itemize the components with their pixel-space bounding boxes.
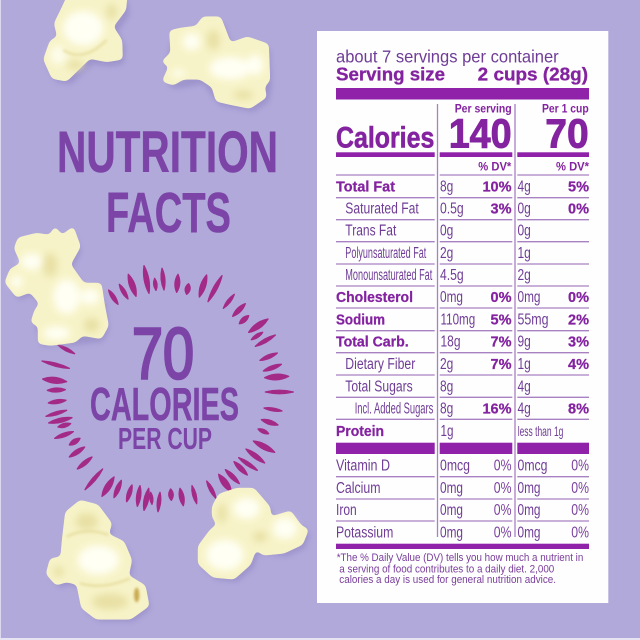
row: protein: Protein <box>336 424 384 440</box>
footnote <box>337 552 583 586</box>
title: Nutrition Facts: NUTRITION <box>57 120 278 185</box>
row: saturated fat: 0g <box>518 201 531 218</box>
row: cholesterol: 0mg <box>440 289 463 306</box>
icon: popcorn middle left <box>5 226 109 346</box>
row: potassium: 0mg <box>440 524 463 541</box>
row: dietary fiber <box>345 356 589 373</box>
row: polyunsaturated fat: Polyunsaturated Fat <box>345 245 427 262</box>
row: cholesterol: 0% <box>568 290 589 306</box>
percent daily value headers <box>478 162 590 174</box>
panel: nutrition facts label <box>317 31 608 603</box>
row: potassium: Potassium <box>336 524 393 541</box>
title: Nutrition Facts <box>57 120 278 245</box>
footnote: calories a day is used for general nutrition advice. <box>339 574 556 586</box>
row: vitamin d: 0mcg <box>440 458 470 475</box>
row: iron <box>336 502 589 519</box>
row: sodium: 2% <box>568 313 589 329</box>
row: calcium: 0mg <box>440 480 463 497</box>
calories row: Calories <box>336 121 434 154</box>
calories row: 140 <box>449 110 512 156</box>
row: calcium: 0% <box>571 480 589 497</box>
row: calcium: 0mg <box>518 480 540 497</box>
percent daily value headers: % DV* <box>556 162 590 174</box>
section bars <box>336 443 589 454</box>
row: cholesterol: 0mg <box>518 289 540 306</box>
row: added sugars: 8g <box>440 400 453 417</box>
row: saturated fat: Saturated Fat <box>345 201 419 218</box>
callout: 70 calories per cup: CALORIES <box>90 378 239 430</box>
row: sodium: Sodium <box>336 313 385 329</box>
table rule lines <box>336 175 589 521</box>
row: monounsaturated fat: Monounsaturated Fat <box>345 267 433 284</box>
column headers: Per 1 cup <box>542 104 589 116</box>
serving size: 2 cups (28g) <box>478 65 588 85</box>
row: total sugars: Total Sugars <box>345 378 413 395</box>
title: Nutrition Facts: FACTS <box>106 181 231 245</box>
row: sodium: 55mg <box>518 312 548 329</box>
row: vitamin d: 0% <box>571 458 589 475</box>
row: added sugars: Incl. Added Sugars <box>355 400 433 417</box>
row: polyunsaturated fat: 2g <box>440 245 453 262</box>
row: added sugars <box>355 400 589 417</box>
row: monounsaturated fat: 4.5g <box>440 267 464 284</box>
row: cholesterol: Cholesterol <box>336 290 413 306</box>
row: sodium: 110mg <box>440 312 475 329</box>
row: added sugars: 4g <box>518 400 531 417</box>
column headers: Per serving <box>455 104 512 116</box>
row: total carb: 18g <box>440 334 460 351</box>
row: protein <box>336 423 563 440</box>
row: iron: 0% <box>494 502 512 519</box>
row: potassium: 0% <box>571 524 589 541</box>
row: total carb: 3% <box>568 335 589 351</box>
row: protein: less than 1g <box>518 423 563 439</box>
row: saturated fat: 0.5g <box>440 201 464 218</box>
serving size <box>336 65 588 85</box>
row: polyunsaturated fat: 1g <box>518 245 531 262</box>
row: monounsaturated fat: 2g <box>518 267 531 284</box>
row: dietary fiber: 7% <box>491 357 512 373</box>
row: total sugars: 8g <box>440 378 453 395</box>
serving size: Serving size <box>336 65 445 85</box>
row: protein: 1g <box>440 423 454 440</box>
row: total fat: 10% <box>482 180 512 196</box>
row: total carb: 9g <box>518 334 531 351</box>
row: total carb: Total Carb. <box>336 335 409 351</box>
row: total fat: Total Fat <box>336 180 395 196</box>
footnote: a serving of food contributes to a daily diet. 2,000 <box>339 563 554 575</box>
row: iron: 0% <box>571 502 589 519</box>
row: total carb: 7% <box>491 335 512 351</box>
row: sodium <box>336 312 589 329</box>
row: saturated fat <box>345 201 589 218</box>
icon: popcorn bottom left <box>46 500 150 621</box>
row: calcium <box>336 480 589 497</box>
calories row: 70 <box>545 110 589 156</box>
calories row <box>336 110 589 157</box>
row: saturated fat: 3% <box>491 202 512 218</box>
row: vitamin d: 0% <box>494 458 512 475</box>
row: dietary fiber: Dietary Fiber <box>345 356 415 373</box>
row: calcium: 0% <box>494 480 512 497</box>
row: saturated fat: 0% <box>568 202 589 218</box>
icon: popcorn bottom right <box>198 488 309 582</box>
row: trans fat: 0g <box>440 223 453 240</box>
row: total fat: 5% <box>568 180 589 196</box>
footnote: *The % Daily Value (DV) tells you how much a nutrient in <box>337 552 583 564</box>
row: total sugars <box>345 378 531 395</box>
icon: popcorn top right <box>161 17 272 112</box>
row: iron: 0mg <box>440 502 463 519</box>
row: dietary fiber: 1g <box>518 356 531 373</box>
bottom bar <box>336 544 589 549</box>
row: total fat: 8g <box>440 179 453 196</box>
row: vitamin d <box>336 458 589 475</box>
row: potassium <box>336 524 589 541</box>
icon: popcorn top left <box>43 0 129 84</box>
row: added sugars: 16% <box>482 401 512 417</box>
row: sodium: 5% <box>491 313 512 329</box>
callout: 70 calories per cup: 70 <box>132 314 194 394</box>
row: trans fat <box>345 223 531 240</box>
row: added sugars: 8% <box>568 401 589 417</box>
row: vitamin d: Vitamin D <box>336 458 390 475</box>
row: vitamin d: 0mcg <box>518 458 548 475</box>
row: trans fat: Trans Fat <box>345 223 397 240</box>
row: dietary fiber: 2g <box>440 356 453 373</box>
column headers <box>455 104 589 116</box>
row: total fat: 4g <box>518 179 531 196</box>
servings per container: about 7 servings per container <box>336 46 559 66</box>
percent daily value headers: % DV* <box>478 162 512 174</box>
row: total carb <box>336 334 589 351</box>
column dividers <box>438 104 515 537</box>
row: total sugars: 4g <box>518 378 531 395</box>
row: cholesterol: 0% <box>491 290 512 306</box>
row: iron: Iron <box>336 502 357 519</box>
row: cholesterol <box>336 289 589 306</box>
row: potassium: 0% <box>494 524 512 541</box>
row: trans fat: 0g <box>518 223 531 240</box>
burst ring of dashes <box>42 266 293 512</box>
callout: 70 calories per cup <box>90 314 239 456</box>
row: calcium: Calcium <box>336 480 380 497</box>
top bar <box>336 88 589 100</box>
callout: 70 calories per cup: PER CUP <box>118 421 212 456</box>
row: dietary fiber: 4% <box>568 357 589 373</box>
row: iron: 0mg <box>518 502 540 519</box>
row: potassium: 0mg <box>518 524 540 541</box>
row: total fat <box>336 179 589 196</box>
